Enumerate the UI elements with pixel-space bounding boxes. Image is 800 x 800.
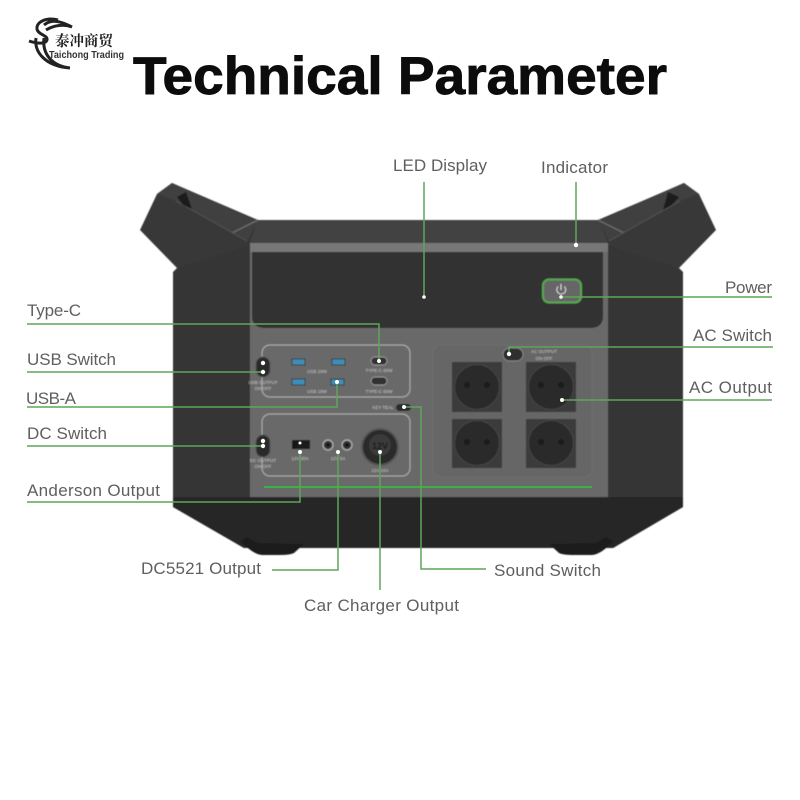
AC socket bottom right <box>526 419 576 468</box>
label: Car Charger Output <box>304 450 459 615</box>
Type-C ports <box>365 357 393 394</box>
label: Power <box>559 278 772 299</box>
DC switch <box>250 435 276 469</box>
label: AC Output: AC Output <box>689 378 772 397</box>
right wing <box>598 183 716 268</box>
USB-A ports <box>292 359 345 385</box>
DC switch: ON OFF <box>254 464 272 469</box>
label: Anderson Output: Anderson Output <box>27 481 160 500</box>
car charger: 12V <box>372 441 388 451</box>
foot left <box>241 537 304 555</box>
Anderson port: 12V 30A <box>291 456 309 461</box>
Anderson port <box>291 440 310 461</box>
label: Sound Switch: Sound Switch <box>494 561 601 580</box>
label: AC Switch: AC Switch <box>693 326 772 345</box>
USB labels: USB 18W <box>307 389 328 394</box>
label: DC Switch: DC Switch <box>27 424 107 443</box>
AC switch: AC OUTPUT <box>531 349 557 354</box>
label: Power: Power <box>725 278 772 297</box>
front panel <box>250 243 608 497</box>
label: LED Display: LED Display <box>393 156 488 175</box>
title: Technical Parameter <box>133 47 667 106</box>
label: DC Switch <box>27 424 265 448</box>
foot right <box>549 537 613 555</box>
label: Indicator: Indicator <box>541 158 608 177</box>
AC switch: ON OFF <box>536 356 553 361</box>
power station device <box>140 183 716 555</box>
USB switch: ON OFF <box>254 386 272 391</box>
AC panel frame <box>433 345 592 477</box>
left wing <box>140 183 258 268</box>
car charger <box>362 429 398 473</box>
body <box>173 240 683 548</box>
label: USB-A: USB-A <box>26 389 77 408</box>
label: Sound Switch <box>402 405 601 580</box>
label: Type-C <box>27 301 381 363</box>
label: AC Output <box>560 378 772 402</box>
DC5521 ports <box>323 440 352 461</box>
label: LED Display <box>393 156 488 299</box>
logo <box>29 19 124 68</box>
USB switch: USB OUTPUT <box>248 380 278 385</box>
AC switch <box>503 348 557 361</box>
sound switch <box>372 404 411 411</box>
logo english name: Taichong Trading <box>49 49 124 61</box>
label: Car Charger Output: Car Charger Output <box>304 596 459 615</box>
label: AC Switch <box>507 326 773 356</box>
USB panel frame <box>262 345 410 397</box>
label: USB-A <box>26 380 339 408</box>
label: DC5521 Output <box>141 450 340 578</box>
USB labels <box>307 369 328 394</box>
label: Anderson Output <box>27 442 302 502</box>
AC socket bottom left <box>452 419 502 468</box>
AC socket top right <box>526 362 576 412</box>
top surface <box>250 220 608 243</box>
DC panel frame <box>262 414 410 476</box>
label: USB Switch <box>27 350 265 374</box>
label: Type-C: Type-C <box>27 301 81 320</box>
bottom accent line <box>264 486 592 488</box>
USB labels: USB 18W <box>307 369 328 374</box>
Type-C ports: TYPE-C 60W <box>365 389 393 394</box>
power button <box>543 280 581 302</box>
logo chinese name: 泰冲商贸 <box>55 32 114 50</box>
display screen <box>252 252 603 328</box>
sound switch: KEY TEAL <box>372 405 394 410</box>
label: Indicator <box>541 158 608 247</box>
label: DC5521 Output: DC5521 Output <box>141 559 261 578</box>
DC5521 ports: 12V 5A <box>331 456 345 461</box>
car charger: 12V 10A <box>371 468 389 473</box>
DC switch: DC OUTPUT <box>250 458 276 463</box>
AC socket top left <box>452 362 502 412</box>
Type-C ports: TYPE-C 60W <box>365 368 393 373</box>
label: USB Switch: USB Switch <box>27 350 116 369</box>
USB switch <box>248 357 278 391</box>
